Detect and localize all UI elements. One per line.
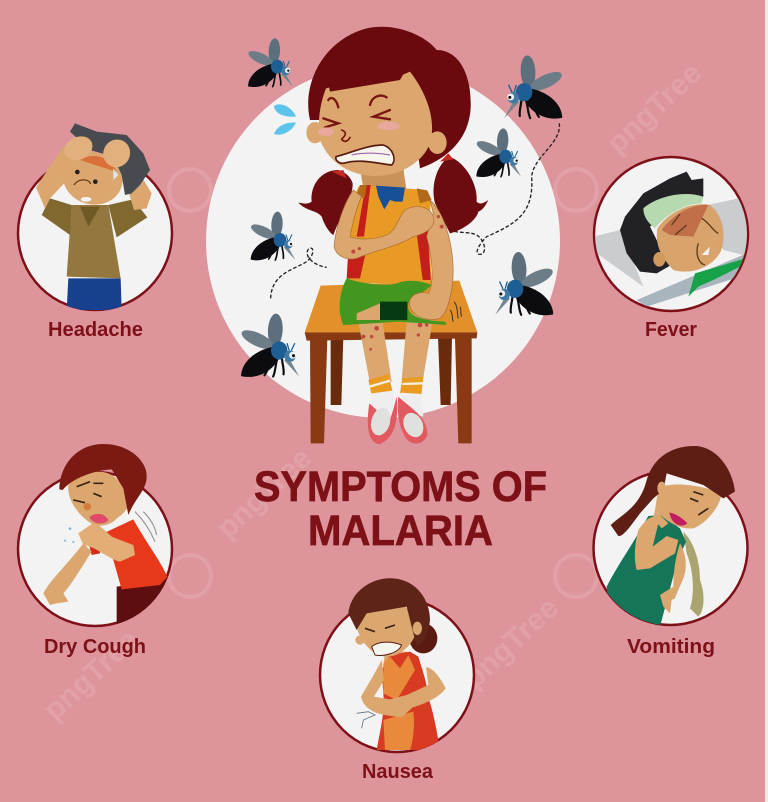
icon: boy coughing xyxy=(43,444,167,627)
panel: fever xyxy=(593,157,750,341)
face details xyxy=(323,96,390,141)
label: Nausea xyxy=(362,761,434,783)
mosquito 3 xyxy=(475,128,521,177)
arms and hands xyxy=(334,190,453,320)
legs and shoes xyxy=(356,310,433,444)
main illustration: girl with mosquitoes xyxy=(239,27,564,444)
mosquito 5 xyxy=(495,252,555,315)
icon: woman holding stomach xyxy=(348,578,446,750)
main white circle xyxy=(206,64,560,418)
title: SYMPTOMS OF xyxy=(254,463,547,511)
label: Fever xyxy=(645,319,697,341)
panel: nausea xyxy=(320,578,474,783)
neck xyxy=(360,168,407,192)
title xyxy=(254,463,547,555)
mosquito 2 xyxy=(504,55,564,119)
scratching marks xyxy=(450,302,462,322)
chair xyxy=(305,281,477,443)
icon: boy holding head xyxy=(36,123,152,310)
panel: headache xyxy=(18,123,172,341)
watermarks: pngTree xyxy=(457,591,565,695)
panel: dry cough xyxy=(18,444,172,658)
mosquito 1 xyxy=(246,38,293,87)
pigtails xyxy=(298,153,488,235)
label: Dry Cough xyxy=(44,636,146,658)
label: Vomiting xyxy=(627,636,715,658)
head and hair xyxy=(306,27,471,176)
dress xyxy=(347,185,432,283)
title: MALARIA xyxy=(308,507,493,555)
skirt xyxy=(340,278,447,325)
icon: boy in bed xyxy=(593,172,750,307)
dashed flight paths xyxy=(271,123,559,298)
icon: girl vomiting xyxy=(607,446,735,627)
watermarks: pngTree xyxy=(600,56,708,160)
mosquito 4 xyxy=(249,211,295,260)
mosquito 6 xyxy=(239,313,299,377)
sweat drops xyxy=(274,104,296,135)
watermarks: pngTree xyxy=(37,623,145,727)
watermarks xyxy=(37,56,708,727)
watermarks: pngTree xyxy=(210,441,318,545)
right page edge xyxy=(765,0,768,802)
label: Headache xyxy=(48,319,143,341)
panel: vomiting xyxy=(594,446,748,658)
